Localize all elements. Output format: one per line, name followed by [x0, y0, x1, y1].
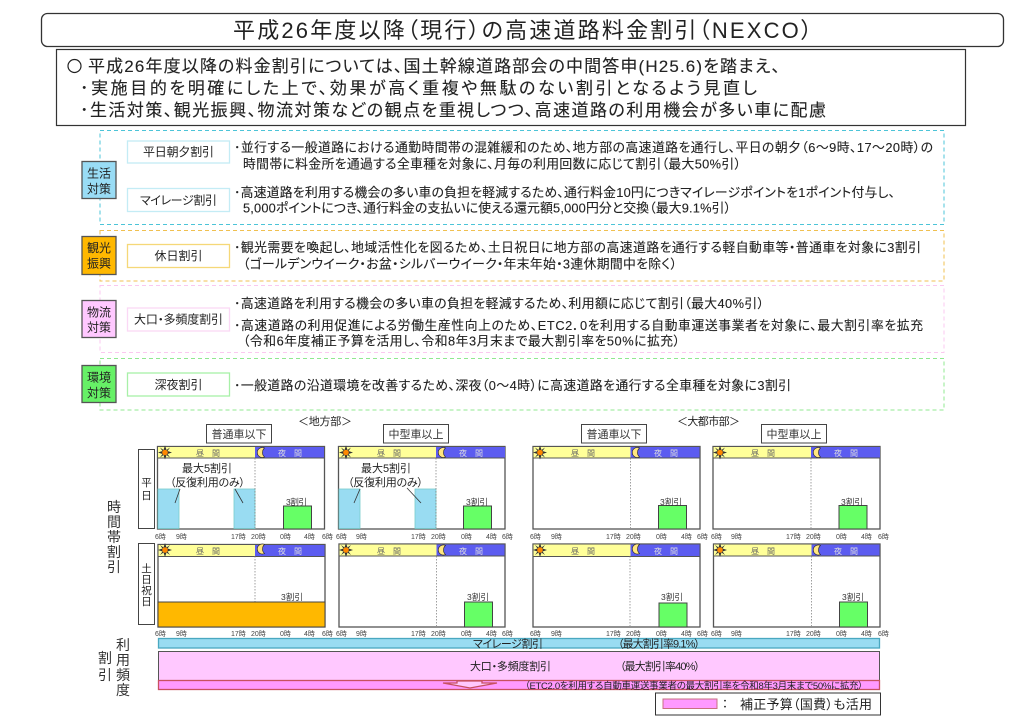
- chart: 地方部 普通車以下 土日祝日: 6時: [322, 630, 333, 638]
- bar: 補正予算 拡充: [158, 680, 880, 692]
- bar: 補正予算 拡充: （ETC2.0を利用する自動車運送事業者の最大割引率を令和8年3月末まで50%に拡充）: [525, 680, 863, 692]
- chart: 地方部 普通車以下 土日祝日: 20時: [251, 630, 266, 638]
- summary box: [56, 50, 966, 126]
- row label: 土日祝日: 土: [141, 562, 152, 575]
- label: 深夜割引: 深夜割引: [154, 378, 203, 392]
- row label: 平日: 平: [141, 477, 152, 489]
- bar: マイレージ割引: [158, 636, 880, 650]
- chart: 大都市部 中型車以上 平日: 4時: [861, 533, 872, 541]
- chart: 大都市部 中型車以上 平日: 20時: [806, 533, 821, 541]
- panel: 生活対策: [82, 130, 944, 224]
- side label: 利用頻度割引: [98, 637, 130, 698]
- chart: 地方部 中型車以上 平日: 4時: [486, 533, 497, 541]
- chart: 大都市部 普通車以下 土日祝日: 夜 間: [654, 547, 678, 556]
- bar: マイレージ割引: マイレージ割引: [473, 636, 543, 650]
- chart: 地方部 普通車以下 平日: 3割引: [286, 497, 307, 507]
- label: 平日朝夕割引: 平日朝夕割引: [143, 145, 214, 159]
- chart: 地方部 普通車以下 平日: 昼 間: [196, 449, 220, 458]
- text: 休日割引 説明: ･観光需要を喚起し、地域活性化を図るため、土日祝日に地方部の高速道路を通行する軽自動車等・普通車を対象に3割引: [234, 240, 921, 255]
- badge: 大都市部 普通車以下: [582, 424, 646, 443]
- badge: 大都市部 中型車以上: [762, 424, 826, 443]
- chart: 地方部 中型車以上 平日: 17時: [411, 533, 426, 541]
- chart: 大都市部 中型車以上 土日祝日: 4時: [861, 630, 872, 638]
- chart: 地方部 普通車以下 土日祝日: 4時: [304, 630, 315, 638]
- label: 平日朝夕割引: [128, 141, 230, 163]
- chart: 地方部 中型車以上 平日: 9時: [356, 533, 367, 541]
- text: マイレージ割引 説明: 5,000ポイントにつき、通行料金の支払いに使える還元額5,000円分と交換（最大9.1%引）: [243, 200, 731, 216]
- text: マイレージ割引 説明: [234, 185, 895, 216]
- chart: 大都市部 中型車以上 平日: 17時: [786, 533, 801, 541]
- chart: 大都市部 普通車以下 土日祝日: 9時: [551, 630, 562, 638]
- badge: 地方部 中型車以上: [384, 424, 448, 443]
- chart: 地方部 普通車以下 土日祝日: 昼 間: [196, 547, 220, 556]
- text: 大口・多頻度割引 説明: ･高速道路の利用促進による労働生産性向上のため、ETC2．0を利用する自動車運送事業者を対象に、最大割引率を拡充: [234, 318, 923, 333]
- text: 深夜割引 説明: ･一般道路の沿道環境を改善するため、深夜（0～4時）に高速道路を通行する全車種を対象に3割引: [234, 378, 791, 393]
- chart: 地方部 普通車以下 平日: 0時: [280, 533, 291, 541]
- chart: 大都市部 中型車以上 平日: 夜 間: [834, 449, 858, 458]
- badge: 大都市部 普通車以下: 普通車以下: [586, 427, 642, 441]
- chart: 大都市部 中型車以上 平日: 昼 間: [751, 449, 775, 458]
- label: マイレージ割引: マイレージ割引: [140, 194, 217, 208]
- chart: 大都市部 中型車以上 平日: 9時: [731, 533, 742, 541]
- label: 休日割引: 休日割引: [154, 249, 203, 263]
- side label: 時間帯割引: 帯: [107, 529, 121, 545]
- row label: 平日: [138, 450, 154, 528]
- panel: 物流対策: [82, 286, 944, 352]
- text: 大口・多頻度割引 説明: [234, 296, 923, 348]
- chart: 大都市部 中型車以上 土日祝日: 昼 間: [751, 547, 775, 556]
- chart: 地方部 普通車以下 土日祝日: 9時: [176, 630, 187, 638]
- chart: 地方部 中型車以上 土日祝日: 6時: [502, 630, 513, 638]
- row label: 土日祝日: 祝: [141, 584, 152, 597]
- heading: 大都市部: ＜大都市部＞: [677, 414, 740, 428]
- label: マイレージ割引: [128, 188, 230, 212]
- chart: 大都市部 普通車以下 土日祝日: 0時: [656, 630, 667, 638]
- row label: 土日祝日: 日: [141, 574, 152, 586]
- chart: 地方部 普通車以下 土日祝日: 3割引: [281, 592, 303, 602]
- chart: 大都市部 普通車以下 平日: 昼 間: [571, 449, 595, 458]
- chart: 大都市部 中型車以上 土日祝日: 6時: [711, 630, 722, 638]
- tag: 環境対策: 対策: [87, 386, 111, 400]
- chart: 地方部 普通車以下 平日: 最大5割引: [182, 461, 232, 475]
- side label: 利用頻度割引: 引: [98, 667, 112, 683]
- chart: 大都市部 普通車以下 平日: 9時: [551, 533, 562, 541]
- chart: 地方部 普通車以下 土日祝日: [155, 543, 333, 638]
- chart: 地方部 普通車以下 平日: （反復利用のみ）: [170, 476, 245, 489]
- chart: 大都市部 普通車以下 平日: 20時: [626, 533, 641, 541]
- chart: 大都市部 普通車以下 平日: 3割引: [660, 497, 682, 507]
- bar: 大口・多頻度割引: [158, 652, 880, 680]
- chart: 地方部 中型車以上 土日祝日: 9時: [356, 630, 367, 638]
- text: 休日割引 説明: [234, 240, 921, 272]
- side label: 利用頻度割引: 割: [98, 650, 112, 666]
- arrow: 拡充: [443, 681, 497, 688]
- chart: 大都市部 普通車以下 平日: 6時: [697, 533, 708, 541]
- tag: 観光振興: 振興: [87, 256, 111, 270]
- chart: 地方部 普通車以下 土日祝日: 0時: [280, 630, 291, 638]
- chart: 地方部 中型車以上 土日祝日: 6時: [336, 630, 347, 638]
- chart: 大都市部 普通車以下 土日祝日: 3割引: [661, 592, 683, 602]
- side label: 利用頻度割引: 利: [116, 637, 130, 653]
- title: 平成26年度以降（現行）の高速道路料金割引（NEXCO）: [233, 18, 812, 43]
- bar: 大口・多頻度割引: （最大割引率40%）: [620, 659, 700, 673]
- chart: 地方部 中型車以上 土日祝日: 17時: [411, 630, 426, 638]
- row label: 土日祝日: [138, 544, 154, 624]
- chart: 地方部 中型車以上 平日: 夜 間: [459, 449, 483, 458]
- chart: 地方部 普通車以下 平日: 17時: [231, 533, 246, 541]
- bar: マイレージ割引: （最大割引率9.1%）: [618, 636, 700, 650]
- chart: 大都市部 普通車以下 平日: 4時: [681, 533, 692, 541]
- tag: 生活対策: 生活: [87, 166, 111, 180]
- chart: 地方部 中型車以上 土日祝日: 20時: [431, 630, 446, 638]
- text: 平日朝夕割引 説明: 時間帯に料金所を通過する全車種を対象に、月毎の利用回数に応じて割引（最大50%引）: [243, 156, 741, 172]
- chart: 地方部 普通車以下 平日: 20時: [251, 533, 266, 541]
- chart: 大都市部 普通車以下 土日祝日: 17時: [606, 630, 621, 638]
- side label: 時間帯割引: 引: [107, 559, 121, 575]
- side label: 時間帯割引: 割: [107, 544, 121, 560]
- chart: 地方部 普通車以下 平日: 夜 間: [278, 449, 302, 458]
- badge: 大都市部 中型車以上: 中型車以上: [766, 427, 822, 441]
- chart: 地方部 中型車以上 土日祝日: 3割引: [467, 592, 489, 602]
- tag: 物流対策: 物流: [87, 306, 111, 320]
- text: マイレージ割引 説明: ･高速道路を利用する機会の多い車の負担を軽減するため、通行料金10円につきマイレージポイントを1ポイント付与し、: [234, 185, 895, 200]
- chart: 地方部 普通車以下 平日: 6時: [322, 533, 333, 541]
- tag: 生活対策: [82, 162, 116, 198]
- title: [42, 14, 1004, 46]
- legend: 補正予算: [656, 693, 880, 715]
- tag: 環境対策: [82, 366, 116, 402]
- tag: 物流対策: 対策: [87, 320, 111, 334]
- panel: 観光振興: [82, 230, 944, 281]
- chart: 大都市部 中型車以上 平日: 0時: [836, 533, 847, 541]
- chart: 大都市部 普通車以下 土日祝日: 6時: [697, 630, 708, 638]
- text: 大口・多頻度割引 説明: （令和6年度補正予算を活用し、令和8年3月末まで最大割引率を50%に拡充）: [243, 334, 680, 348]
- badge: 地方部 中型車以上: 中型車以上: [388, 427, 444, 441]
- chart: 地方部 中型車以上 平日: 昼 間: [377, 449, 401, 458]
- legend: 補正予算: ：: [722, 697, 728, 711]
- chart: 大都市部 普通車以下 平日: [530, 446, 708, 541]
- chart: 地方部 中型車以上 平日: （反復利用のみ）: [348, 476, 423, 489]
- side label: 時間帯割引: 時: [107, 499, 121, 515]
- tag: 生活対策: 対策: [87, 182, 111, 196]
- chart: 大都市部 普通車以下 平日: 6時: [530, 533, 541, 541]
- panel: 環境対策: [82, 358, 944, 410]
- bar: 大口・多頻度割引: 大口・多頻度割引: [470, 659, 551, 673]
- chart: 地方部 普通車以下 土日祝日: 17時: [231, 630, 246, 638]
- chart: 大都市部 普通車以下 平日: 夜 間: [654, 449, 678, 458]
- chart: 大都市部 普通車以下 土日祝日: [530, 543, 708, 638]
- label: 大口・多頻度割引: [128, 308, 230, 331]
- chart: 地方部 普通車以下 土日祝日: 夜 間: [278, 547, 302, 556]
- label: 大口・多頻度割引: 大口・多頻度割引: [134, 312, 223, 326]
- chart: 地方部 中型車以上 平日: 20時: [431, 533, 446, 541]
- chart: 地方部 中型車以上 土日祝日: 0時: [461, 630, 472, 638]
- chart: 大都市部 中型車以上 土日祝日: 夜 間: [834, 547, 858, 556]
- chart: 地方部 普通車以下 平日: 6時: [155, 533, 166, 541]
- chart: 地方部 中型車以上 平日: [336, 446, 513, 541]
- chart: 大都市部 普通車以下 土日祝日: 4時: [681, 630, 692, 638]
- chart: 大都市部 中型車以上 土日祝日: 6時: [878, 630, 889, 638]
- chart: 地方部 中型車以上 土日祝日: 昼 間: [377, 547, 401, 556]
- chart: 地方部 普通車以下 平日: 9時: [176, 533, 187, 541]
- badge: 地方部 普通車以下: [206, 424, 272, 443]
- chart: 地方部 中型車以上 土日祝日: 4時: [486, 630, 497, 638]
- side label: 利用頻度割引: 用: [116, 652, 130, 668]
- chart: 大都市部 普通車以下 土日祝日: 昼 間: [571, 547, 595, 556]
- text: 平日朝夕割引 説明: ･並行する一般道路における通勤時間帯の混雑緩和のため、地方部の高速道路を通行し、平日の朝夕（6～9時、17～20時）の: [234, 140, 933, 155]
- row label: 土日祝日: 日: [141, 596, 152, 608]
- text: 大口・多頻度割引 説明: ･高速道路を利用する機会の多い車の負担を軽減するため、利用額に応じて割引（最大40%引）: [234, 296, 764, 311]
- chart: 地方部 中型車以上 土日祝日: 夜 間: [459, 547, 483, 556]
- side label: 時間帯割引: [107, 499, 121, 575]
- chart: 大都市部 中型車以上 土日祝日: 0時: [836, 630, 847, 638]
- summary box: ･実施目的を明確にした上で、効果が高く重複や無駄のない割引となるよう見直し: [80, 79, 757, 98]
- tag: 物流対策: [82, 300, 116, 338]
- chart: 大都市部 普通車以下 平日: 0時: [656, 533, 667, 541]
- chart: 大都市部 普通車以下 土日祝日: 20時: [626, 630, 641, 638]
- side label: 利用頻度割引: 度: [116, 682, 130, 698]
- chart: 大都市部 中型車以上 土日祝日: [711, 543, 889, 638]
- text: 平日朝夕割引 説明: [234, 140, 933, 172]
- text: 休日割引 説明: （ゴールデンウイーク・お盆・シルバーウイーク・年末年始・3連休期間中を除く）: [243, 256, 677, 272]
- tag: 観光振興: [82, 236, 116, 274]
- chart: 大都市部 中型車以上 平日: 3割引: [841, 497, 863, 507]
- side label: 時間帯割引: 間: [107, 514, 121, 530]
- chart: 大都市部 普通車以下 土日祝日: 6時: [530, 630, 541, 638]
- chart: 地方部 中型車以上 土日祝日: [336, 543, 513, 638]
- badge: 地方部 普通車以下: 普通車以下: [212, 427, 266, 441]
- chart: 大都市部 中型車以上 平日: [711, 446, 889, 541]
- chart: 大都市部 普通車以下 平日: 17時: [606, 533, 621, 541]
- chart: 地方部 中型車以上 平日: 6時: [502, 533, 513, 541]
- chart: 大都市部 中型車以上 土日祝日: 20時: [806, 630, 821, 638]
- chart: 大都市部 中型車以上 土日祝日: 17時: [786, 630, 801, 638]
- tag: 環境対策: 環境: [87, 370, 111, 384]
- chart: 地方部 普通車以下 土日祝日: 6時: [155, 630, 166, 638]
- chart: 地方部 普通車以下 平日: 4時: [304, 533, 315, 541]
- chart: 地方部 中型車以上 平日: 6時: [336, 533, 347, 541]
- chart: 大都市部 中型車以上 平日: 6時: [711, 533, 722, 541]
- legend: 補正予算: 補正予算（国費）も活用: [740, 697, 872, 712]
- chart: 地方部 中型車以上 平日: 最大5割引: [361, 461, 411, 475]
- row label: 平日: 日: [141, 490, 152, 502]
- heading: 地方部: ＜地方部＞: [298, 414, 352, 428]
- label: 深夜割引: [128, 373, 230, 396]
- label: 休日割引: [128, 244, 230, 268]
- chart: 大都市部 中型車以上 土日祝日: 3割引: [842, 592, 864, 602]
- chart: 地方部 中型車以上 平日: 0時: [461, 533, 472, 541]
- chart: 大都市部 中型車以上 平日: 6時: [878, 533, 889, 541]
- chart: 大都市部 中型車以上 土日祝日: 9時: [731, 630, 742, 638]
- summary box: 平成26年度以降の料金割引については、国土幹線道路部会の中間答申(H25.6)を踏まえ、: [88, 56, 780, 76]
- summary box: ･生活対策、観光振興、物流対策などの観点を重視しつつ、高速道路の利用機会が多い車に配慮: [80, 101, 826, 120]
- chart: 地方部 普通車以下 平日: [155, 446, 333, 541]
- chart: 地方部 中型車以上 平日: 3割引: [466, 497, 488, 507]
- side label: 利用頻度割引: 頻: [116, 667, 130, 683]
- tag: 観光振興: 観光: [87, 241, 111, 255]
